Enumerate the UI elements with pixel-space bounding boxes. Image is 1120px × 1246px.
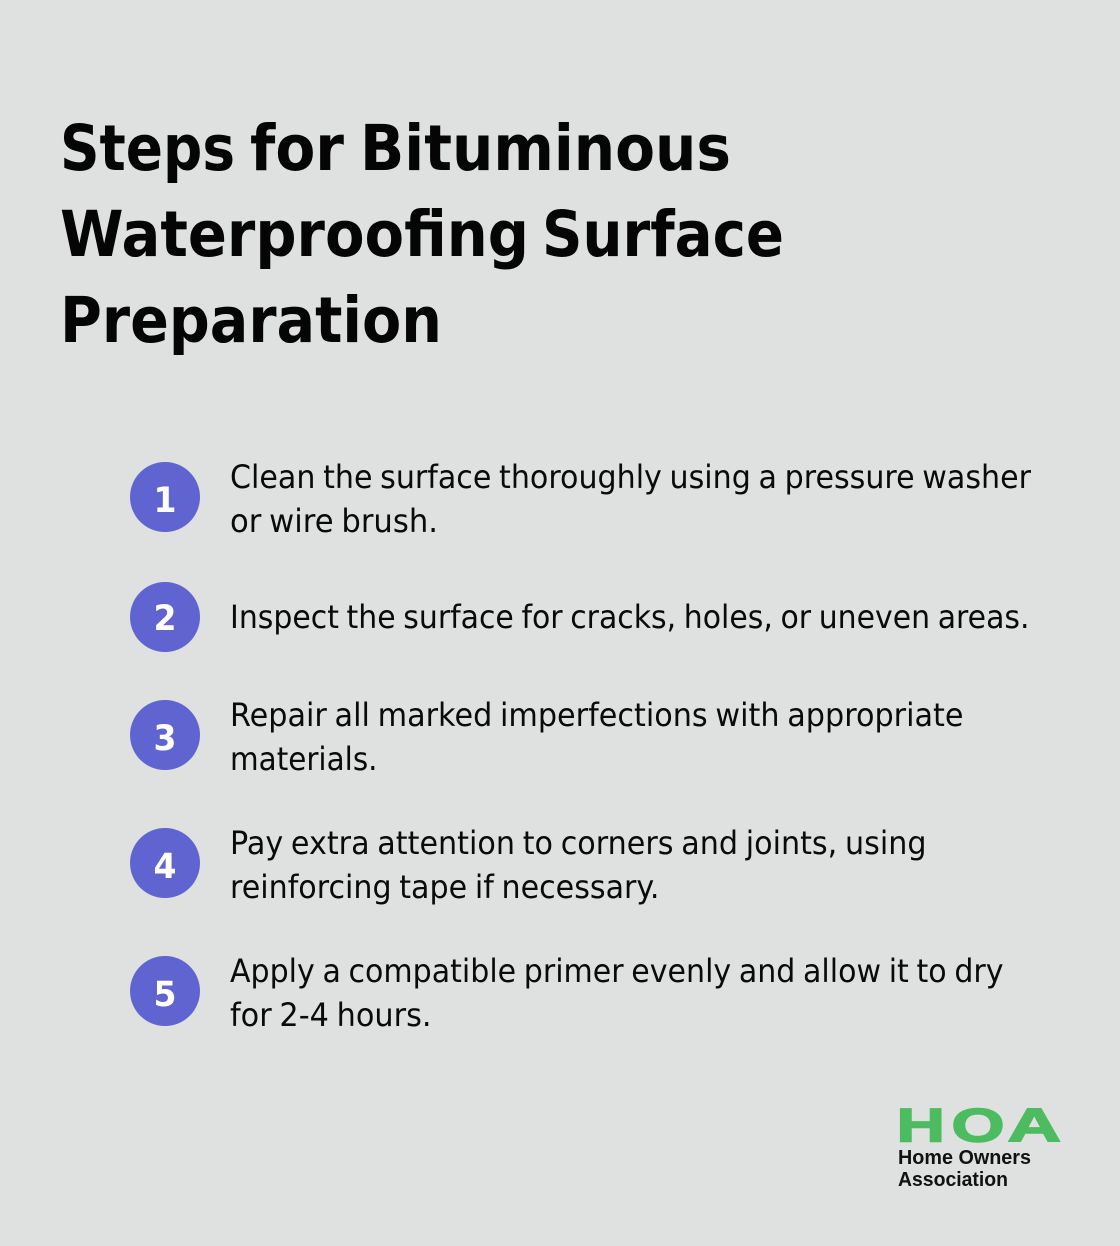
step 4 text: Pay extra attention to corners and joints, using [230, 824, 926, 862]
step 5 [130, 952, 1004, 1034]
logo: HOA Home Owners Association: A [1008, 1098, 1061, 1152]
logo: HOA Home Owners Association: O [952, 1098, 1004, 1152]
step 2 [130, 582, 1030, 652]
number badge 2: 2 [154, 599, 176, 639]
title: Bituminous [360, 112, 731, 185]
logo: HOA Home Owners Association: Home Owners [898, 1147, 1031, 1169]
number badge 5 [130, 956, 200, 1026]
logo: HOA Home Owners Association: H [896, 1098, 945, 1152]
title: Surface [542, 198, 784, 271]
step 5 text [230, 952, 1004, 1034]
step 4 [130, 824, 926, 906]
step 4 text: reinforcing tape if necessary. [230, 868, 660, 906]
step 3 [130, 696, 964, 778]
number badge 1 [130, 462, 200, 532]
step 1 text: Clean the surface thoroughly using a pressure washer [230, 458, 1032, 496]
step 3 text [230, 696, 964, 778]
title: Preparation [60, 284, 442, 357]
number badge 3 [130, 700, 200, 770]
title: Waterproofing [60, 198, 529, 271]
logo: HOA Home Owners Association [896, 1098, 1061, 1191]
number badge 4 [130, 828, 200, 898]
step 3 text: materials. [230, 740, 378, 778]
number badge 2 [130, 582, 200, 652]
title: Steps [60, 112, 235, 185]
step 1 [130, 458, 1032, 540]
step 4 text [230, 824, 926, 906]
step 3 text: Repair all marked imperfections with appropriate [230, 696, 964, 734]
step 1 text [230, 458, 1032, 540]
step 2 text: Inspect the surface for cracks, holes, or uneven areas. [230, 598, 1030, 636]
title [60, 112, 784, 357]
number badge 3: 3 [154, 719, 176, 759]
number badge 5: 5 [154, 975, 176, 1015]
logo: HOA Home Owners Association: Association [898, 1169, 1008, 1191]
number badge 4: 4 [154, 847, 176, 887]
title: for [250, 112, 344, 185]
number badge 1: 1 [154, 481, 176, 521]
step 5 text: Apply a compatible primer evenly and allow it to dry [230, 952, 1004, 990]
step 1 text: or wire brush. [230, 502, 438, 540]
step 5 text: for 2-4 hours. [230, 996, 432, 1034]
